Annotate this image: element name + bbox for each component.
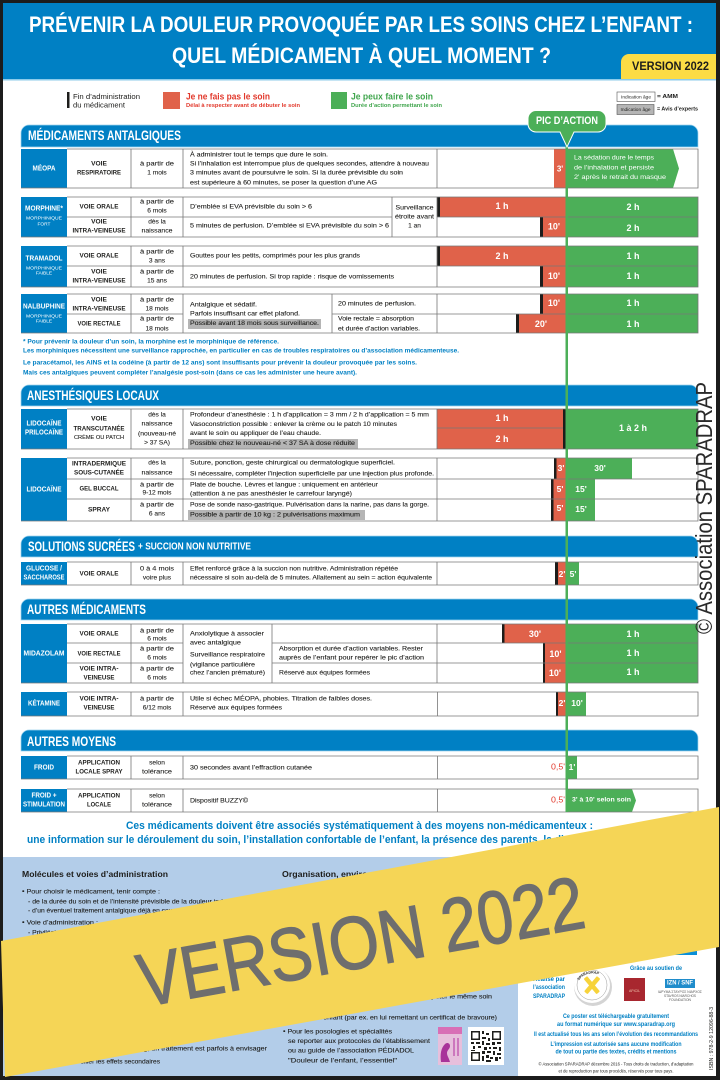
panel: lidocaïne prilocaïne: LIDOCAÏNE (26, 420, 62, 428)
panel: froid: FROID (34, 764, 54, 772)
panel: nalbuphine: Parfois insuffisant car effet plafond. (190, 310, 300, 318)
panel: midazolam: Absorption et durée d’action variables. Rester (279, 646, 423, 652)
legend: fin d'administration: Fin d’administration (73, 92, 140, 101)
panel: lidocaïne prilocaïne: Vasoconstriction possible : enlever la crème ou le patch 10 minutes (190, 421, 397, 428)
panel: kétamine: à partir de (140, 696, 174, 702)
panel: lidocaïne: 30' (594, 463, 606, 473)
panel: lidocaïne prilocaïne: 2 h (495, 434, 509, 444)
panel: froid: APPLICATION (78, 760, 120, 766)
panel: lidocaïne (21, 458, 698, 521)
panel: lidocaïne prilocaïne: Profondeur d’anesthésie : 1 h d’application = 3 mm / 2 h d’application = 5 mm (190, 412, 429, 418)
panel: lidocaïne: LIDOCAÏNE (26, 486, 62, 494)
panel: lidocaïne: 15' (575, 484, 587, 494)
panel: tramadol: 15 ans (147, 278, 168, 284)
panel: morphine: 2 h (626, 202, 640, 212)
panel: froid (21, 756, 698, 779)
sponsors (624, 966, 703, 1002)
panel: méopa: MÉOPA (32, 164, 56, 172)
panel: lidocaïne: Pose de sonde naso-gastrique. Pulvérisation dans la narine, pas dans la gorge. (190, 502, 429, 508)
version tab (621, 54, 716, 79)
panel: midazolam: 6 mois (147, 636, 167, 642)
panel: froid + stimulation: selon (149, 792, 165, 800)
title: QUEL MÉDICAMENT À QUEL MOMENT ? (172, 43, 551, 68)
panel: morphine: à partir de (140, 198, 174, 206)
panel: lidocaïne: 9-12 mois (143, 490, 172, 496)
panel: glucose saccharose: GLUCOSE / (26, 566, 62, 572)
panel: glucose saccharose: Effet renforcé grâce à la succion non nutritive. Administration répétée (190, 566, 399, 572)
panel: froid + stimulation (21, 789, 698, 812)
published by: SPARADRAP (533, 994, 565, 1000)
panel: tramadol: 10' (548, 271, 560, 281)
panel: nalbuphine: 20' (535, 319, 547, 329)
header band (3, 3, 716, 80)
panel: méopa: La sédation dure le temps (574, 154, 655, 162)
panel: conseils: - de la durée du soin et de l’intensité prévisible de la douleur induite (28, 898, 235, 906)
panel: lidocaïne: 5' (557, 484, 563, 494)
published by: Réalisé par (533, 977, 566, 983)
panel: lidocaïne: Possible à partir de 10 kg : 2 pulvérisations maximum (190, 512, 360, 518)
panel: conseils: - d’un éventuel traitement antalgique déjà en cours (28, 908, 178, 914)
legend: je peux faire le soin: Je peux faire le soin (351, 92, 433, 102)
panel: méopa: 1 mois (147, 170, 167, 176)
download notice: Il est actualisé tous les ans selon l’évolution des recommandations (534, 1032, 699, 1038)
panel: lidocaïne: à partir de (140, 502, 174, 508)
panel: tramadol: VOIE ORALE (80, 252, 119, 260)
panel: nalbuphine: VOIE (91, 296, 107, 304)
panel: morphine: INTRA-VEINEUSE (72, 228, 126, 234)
panel: lidocaïne: 5' (557, 503, 563, 513)
icon: QR code (468, 1027, 504, 1065)
pic d'action label: PIC D’ACTION (536, 115, 598, 127)
panel: glucose saccharose: SACCHAROSE (24, 574, 65, 582)
blue statement: une information sur le déroulement du soin, l’installation confortable de l’enfant, la présence des parents, la distraction (27, 834, 607, 846)
panel: lidocaïne: Plate de bouche. Lèvres et langue : uniquement en antérieur (190, 482, 378, 488)
panel: conseils: ou au guide de l’association PÉDIADOL (288, 1046, 415, 1054)
panel: morphine: MORPHINIQUE (26, 216, 62, 222)
sponsors: Grâce au soutien de (630, 966, 683, 972)
footnotes antalgiques (23, 338, 459, 376)
section heading: solutions sucrées (21, 536, 698, 557)
panel: lidocaïne: 3' (558, 463, 564, 473)
panel: lidocaïne prilocaïne: (nouveau-né (138, 430, 176, 438)
panel: nalbuphine: et durée d’action variables. (338, 326, 420, 332)
title (29, 12, 693, 68)
sponsors: APICIL (629, 989, 640, 993)
panel: midazolam: 1 h (626, 629, 640, 639)
panel: midazolam (21, 624, 698, 683)
panel: midazolam: VOIE RECTALE (78, 650, 121, 658)
panel: froid: tolérance (142, 768, 172, 776)
panel: froid: 30 secondes avant l’effraction cutanée (190, 764, 313, 772)
panel: morphine: D’emblée si EVA prévisible du soin > 6 (190, 204, 313, 210)
pic d'action label (528, 110, 606, 147)
banner: version 2022 (1, 807, 719, 1077)
panel: midazolam: avec antalgique (190, 640, 242, 646)
panel: nalbuphine: MORPHINIQUE (26, 314, 62, 320)
panel: conseils: • Pour les posologies et spécialités (283, 1028, 392, 1036)
panel: glucose saccharose: VOIE ORALE (80, 570, 119, 578)
panel: méopa: RESPIRATOIRE (77, 170, 122, 176)
section heading: autres médicaments: AUTRES MÉDICAMENTS (27, 601, 146, 617)
panel: lidocaïne: à partir de (140, 482, 174, 488)
panel: glucose saccharose (21, 562, 698, 585)
panel: conseils: "Douleur de l’enfant, l’essentiel" (288, 1058, 397, 1064)
panel: glucose saccharose: voire plus (143, 574, 172, 582)
panel: nalbuphine: 18 mois (145, 326, 169, 332)
legend: indication age: = AMM (657, 94, 678, 100)
panel: lidocaïne prilocaïne: VOIE (91, 416, 107, 422)
panel: midazolam: 1 h (626, 667, 640, 677)
panel: nalbuphine: Voie rectale = absorption (338, 316, 415, 322)
panel: nalbuphine: FAIBLE (36, 318, 52, 324)
panel: méopa: VOIE (91, 160, 107, 168)
panel: midazolam: auprès de l’enfant pour repérer le pic d’action (279, 654, 425, 662)
panel: froid: LOCALE SPRAY (76, 768, 123, 776)
legend: fin d'administration: du médicament (73, 100, 126, 110)
panel: lidocaïne prilocaïne: naissance (142, 420, 173, 428)
copyright: et de reproduction par tous procédés, réservés pour tous pays. (558, 1068, 674, 1074)
panel: midazolam: 1 h (626, 648, 640, 658)
download notice: L’impression est autorisée sans aucune modification (550, 1042, 682, 1048)
panel: midazolam: VEINEUSE (84, 674, 115, 682)
panel: froid + stimulation: LOCALE (87, 802, 112, 808)
panel: glucose saccharose: 5' (570, 569, 576, 579)
panel: froid: selon (149, 760, 165, 766)
legend: indication age: = Avis d’experts (657, 106, 698, 112)
section heading: solutions sucrées: + SUCCION NON NUTRITIVE (138, 542, 251, 552)
panel: tramadol: FAIBLE (36, 270, 52, 276)
copyright (538, 1060, 694, 1074)
sponsors: STAVROS NIARCHOS (664, 994, 697, 998)
footnotes antalgiques: Les morphiniques nécessitent une surveillance rapprochée, en particulier en cas de troubles respiratoires ou d’association médicamenteuse. (23, 348, 459, 354)
panel: tramadol: VOIE (91, 268, 107, 276)
footnotes antalgiques: * Pour prévenir la douleur d’un soin, la morphine est le morphinique de référence. (23, 338, 279, 346)
panel: morphine: MORPHINE* (25, 206, 63, 212)
panel: kétamine: Réservé aux équipes formées (190, 704, 282, 712)
panel: lidocaïne prilocaïne: Possible chez le nouveau-né < 37 SA à dose réduite (190, 440, 356, 447)
panel: conseils (3, 857, 518, 1076)
panel: morphine: 5 minutes de perfusion. D’emblée si EVA prévisible du soin > 6 (190, 222, 390, 230)
panel: lidocaïne: Si nécessaire, compléter l’injection superficielle par une injection plus profonde. (190, 470, 434, 478)
panel: lidocaïne prilocaïne: 1 à 2 h (619, 423, 647, 433)
fragment: blue logo strip (672, 946, 697, 955)
panel: nalbuphine: 1 h (626, 298, 640, 308)
panel: kétamine: 2' (559, 698, 565, 708)
panel: nalbuphine: 18 mois (145, 306, 169, 312)
panel: midazolam: 6 mois (147, 654, 167, 662)
legend: je peux faire le soin (331, 92, 443, 109)
panel: kétamine: VEINEUSE (84, 704, 115, 712)
panel: glucose saccharose: nécessaire si soin au-delà de 5 minutes. Allaitement au sein = action équivalente (190, 574, 433, 582)
panel: morphine: 1 an (408, 222, 421, 230)
panel: tramadol: 1 h (626, 271, 640, 281)
legend: fin d'administration (67, 92, 140, 110)
panel: morphine: 10' (548, 222, 560, 232)
panel: froid + stimulation: 0,5' (551, 796, 566, 804)
blue statement (27, 820, 607, 846)
panel: kétamine: VOIE INTRA- (80, 696, 118, 702)
panel: midazolam: MIDAZOLAM (24, 650, 65, 658)
panel: méopa (21, 149, 698, 188)
panel: lidocaïne prilocaïne: PRILOCAÏNE (25, 428, 63, 436)
sponsors: ΙΔΡΥΜΑ ΣΤΑΥΡΟΣ ΝΙΑΡΧΟΣ (658, 990, 703, 994)
footnotes antalgiques: Mais ces antalgiques peuvent compléter l’analgésie post-soin (dans ce cas les administer une heure avant). (23, 370, 357, 376)
legend: je ne fais pas le soin (163, 92, 301, 109)
section heading: autres médicaments (21, 599, 698, 620)
section heading: anesthésiques locaux (21, 385, 698, 406)
panel: morphine: naissance (142, 228, 173, 234)
panel: lidocaïne: SOUS-CUTANÉE (74, 468, 125, 476)
panel: glucose saccharose: 0 à 4 mois (140, 566, 175, 572)
panel: lidocaïne: (attention à ne pas anesthésier le carrefour laryngé) (190, 490, 352, 498)
panel: lidocaïne: dès la (148, 460, 166, 466)
panel: tramadol: à partir de (140, 268, 174, 276)
panel: kétamine: 10' (571, 698, 583, 708)
legend: indication age: Indication âge (621, 94, 651, 99)
panel: conseils: Molécules et voies d’administration (22, 869, 168, 879)
section heading: autres moyens (21, 730, 698, 751)
panel: morphine: étroite avant (395, 214, 434, 220)
panel: kétamine: Utile si échec MÉOPA, phobies. Titration de faibles doses. (190, 694, 372, 702)
panel: midazolam: VOIE ORALE (80, 630, 119, 638)
panel: méopa: Si l’inhalation est interrompue plus de quelques secondes, attendre à nouveau (190, 160, 430, 168)
panel: kétamine: 6/12 mois (143, 704, 172, 712)
panel: froid + stimulation: tolérance (142, 802, 172, 808)
sponsors: IZN / SNF (667, 980, 693, 986)
download notice: de tout ou partie des textes, crédits et mentions (556, 1050, 677, 1056)
legend: indication age: Indication âge (620, 107, 651, 112)
panel: lidocaïne: SPRAY (88, 506, 111, 514)
panel: froid: 0,5' (551, 762, 566, 772)
panel: morphine: 6 mois (147, 208, 167, 214)
panel: morphine: FORT (38, 222, 51, 228)
legend: je ne fais pas le soin: Je ne fais pas le soin (186, 92, 270, 102)
section heading: autres moyens: AUTRES MOYENS (27, 733, 116, 749)
panel: conseils: - Prévenir et surveiller les effets secondaires (30, 1058, 160, 1066)
panel: conseils: - Valoriser l’enfant (par ex. en lui remettant un certificat de bravoure) (287, 1014, 497, 1022)
panel: midazolam: 10' (549, 668, 561, 678)
panel: nalbuphine: Antalgique et sédatif. (190, 302, 257, 308)
panel: midazolam: Surveillance respiratoire (190, 652, 266, 658)
legend: je ne fais pas le soin: Délai à respecter avant de débuter le soin (186, 103, 301, 109)
panel: morphine: VOIE (91, 218, 107, 226)
published by: l’association (533, 985, 565, 991)
copyright: © Association SPARADRAP décembre 2016 - Tous droits de traduction, d’adaptation (538, 1060, 694, 1066)
footnotes antalgiques: Le paracétamol, les AINS et la codéine (à partir de 12 ans) sont insuffisants pour prévenir la douleur provoquée par les soins. (23, 360, 417, 366)
panel: lidocaïne prilocaïne: TRANSCUTANÉE (74, 424, 125, 432)
panel: nalbuphine: 10' (548, 298, 560, 308)
panel: froid + stimulation: FROID + (32, 792, 56, 800)
panel: froid + stimulation: APPLICATION (78, 792, 120, 800)
panel: lidocaïne: naissance (142, 470, 173, 476)
panel: conseils: • Pour choisir le médicament, tenir compte : (22, 888, 160, 896)
download notice (534, 1014, 699, 1056)
section heading: médicaments antalgiques: MÉDICAMENTS ANTALGIQUES (28, 127, 181, 143)
panel: froid: 1' (569, 762, 575, 772)
panel: midazolam: à partir de (140, 646, 174, 652)
section heading: solutions sucrées: SOLUTIONS SUCRÉES (28, 538, 135, 554)
panel: tramadol: TRAMADOL (26, 256, 63, 262)
panel: midazolam: Anxiolytique à associer (190, 630, 264, 638)
pic d'action marker line (566, 130, 568, 812)
panel: tramadol: 20 minutes de perfusion. Si trop rapide : risque de vomissements (190, 274, 394, 280)
vertical credit: © Association SPARADRAP (691, 382, 717, 634)
panel: nalbuphine: à partir de (140, 296, 174, 304)
panel: nalbuphine (21, 294, 698, 333)
panel: midazolam: (vigilance particulière (190, 662, 256, 668)
panel: midazolam: chez l’ancien prématuré) (190, 670, 265, 676)
panel: conseils: - Ne pas répéter le même soin (396, 994, 493, 1000)
panel: méopa: 3 minutes avant de poursuivre le soin. Si la durée prévisible du soin (190, 170, 404, 176)
panel: midazolam: 6 mois (147, 674, 167, 682)
blue statement: Ces médicaments doivent être associés systématiquement à des moyens non-médicamenteux : (126, 820, 593, 832)
panel: conseils: Organisation, environnement (282, 869, 404, 879)
panel: morphine (21, 197, 698, 237)
icon: sparadrap logo: SPARADRAP (577, 971, 599, 980)
banner: version 2022: VERSION 2022 (131, 860, 591, 1023)
legend: je peux faire le soin: Durée d’action permettant le soin (351, 103, 443, 109)
sponsors: FOUNDATION (669, 998, 691, 1002)
panel: midazolam: VOIE INTRA- (80, 666, 118, 672)
published by (533, 977, 566, 1000)
panel: morphine: 2 h (626, 223, 640, 233)
panel: glucose saccharose: 2' (559, 569, 565, 579)
panel: nalbuphine: 20 minutes de perfusion. (338, 300, 416, 308)
panel: conseils: • Voie d’administration : (22, 920, 98, 926)
panel: lidocaïne: GEL BUCCAL (80, 486, 118, 492)
panel: lidocaïne prilocaïne: avant le soin ou appliquer de l’eau chaude. (190, 430, 321, 437)
panel: midazolam: à partir de (140, 666, 174, 672)
panel: kétamine (21, 692, 698, 716)
panel: midazolam: 30' (529, 629, 541, 639)
panel: tramadol (21, 246, 698, 287)
panel: froid + stimulation: Dispositif BUZZY© (190, 796, 248, 804)
panel: nalbuphine: Possible avant 18 mois sous surveillance. (190, 320, 319, 327)
panel: lidocaïne prilocaïne (21, 409, 698, 449)
panel: nalbuphine: NALBUPHINE (23, 304, 65, 310)
panel: méopa: À administrer tout le temps que dure le soin. (190, 150, 328, 158)
panel: lidocaïne: 6 ans (149, 510, 166, 518)
panel: tramadol: 1 h (626, 251, 640, 261)
panel: tramadol: 2 h (495, 251, 509, 261)
panel: conseils: - Privilégier (28, 930, 62, 936)
panel: méopa: de l’inhalation et persiste (574, 164, 654, 172)
panel: lidocaïne prilocaïne: 1 h (495, 413, 509, 423)
panel: morphine: dès la (148, 218, 166, 226)
version tab: VERSION 2022 (632, 61, 709, 73)
panel: lidocaïne: Suture, ponction, geste chirurgical ou dermatologique superficiel. (190, 460, 395, 466)
legend: indication age (617, 92, 698, 114)
panel: kétamine: KÉTAMINE (28, 698, 60, 708)
section heading: anesthésiques locaux: ANESTHÉSIQUES LOCAUX (27, 387, 159, 403)
section heading: médicaments antalgiques (21, 125, 698, 147)
download notice: au format numérique sur www.sparadrap.org (557, 1022, 675, 1028)
panel: lidocaïne: INTRADERMIQUE (72, 460, 127, 468)
panel: tramadol: 3 ans (149, 258, 166, 264)
panel: lidocaïne prilocaïne: dès la (148, 412, 166, 418)
panel: nalbuphine: à partir de (140, 316, 174, 322)
panel: lidocaïne prilocaïne: CRÈME OU PATCH (74, 434, 124, 441)
panel: méopa: 2' après le retrait du masque (574, 174, 666, 181)
download notice: Ce poster est téléchargeable gratuitement (563, 1014, 669, 1020)
panel: midazolam: 10' (549, 649, 562, 659)
panel: lidocaïne: 15' (575, 504, 587, 514)
panel: nalbuphine: 1 h (626, 319, 640, 329)
panel: morphine: 1 h (495, 201, 509, 211)
panel: conseils: se reporter aux protocoles de l’établissement (288, 1038, 430, 1045)
panel: morphine: VOIE ORALE (80, 204, 119, 210)
panel: méopa: 3' (557, 164, 563, 174)
icon: sparadrap logo (574, 970, 612, 1006)
panel: midazolam: Réservé aux équipes formées (279, 670, 370, 676)
panel: tramadol: à partir de (140, 248, 174, 256)
panel: nalbuphine: INTRA-VEINEUSE (72, 306, 126, 312)
panel: tramadol: INTRA-VEINEUSE (72, 278, 126, 284)
panel: froid + stimulation: 3' à 10' selon soin (572, 796, 631, 804)
panel: méopa: à partir de (140, 160, 174, 168)
isbn: ISBN : 978-2-9 12096-88-3 (709, 1007, 715, 1070)
panel: méopa: est supérieure à 60 minutes, se poser la question d’une AG (190, 180, 377, 186)
panel: lidocaïne prilocaïne: > 37 SA) (144, 440, 170, 446)
panel: midazolam: à partir de (140, 628, 174, 634)
panel: conseils: - Si le soin est long, un traitement est parfois à envisager (87, 1046, 267, 1052)
panel: nalbuphine: VOIE RECTALE (78, 320, 121, 328)
panel: morphine: Surveillance (396, 204, 434, 212)
panel: tramadol: Gouttes pour les petits, comprimés pour les plus grands (190, 252, 360, 260)
panel: froid + stimulation: STIMULATION (23, 802, 65, 808)
panel: tramadol: MORPHINIQUE (26, 266, 62, 272)
icon: booklet cover (438, 1027, 462, 1065)
